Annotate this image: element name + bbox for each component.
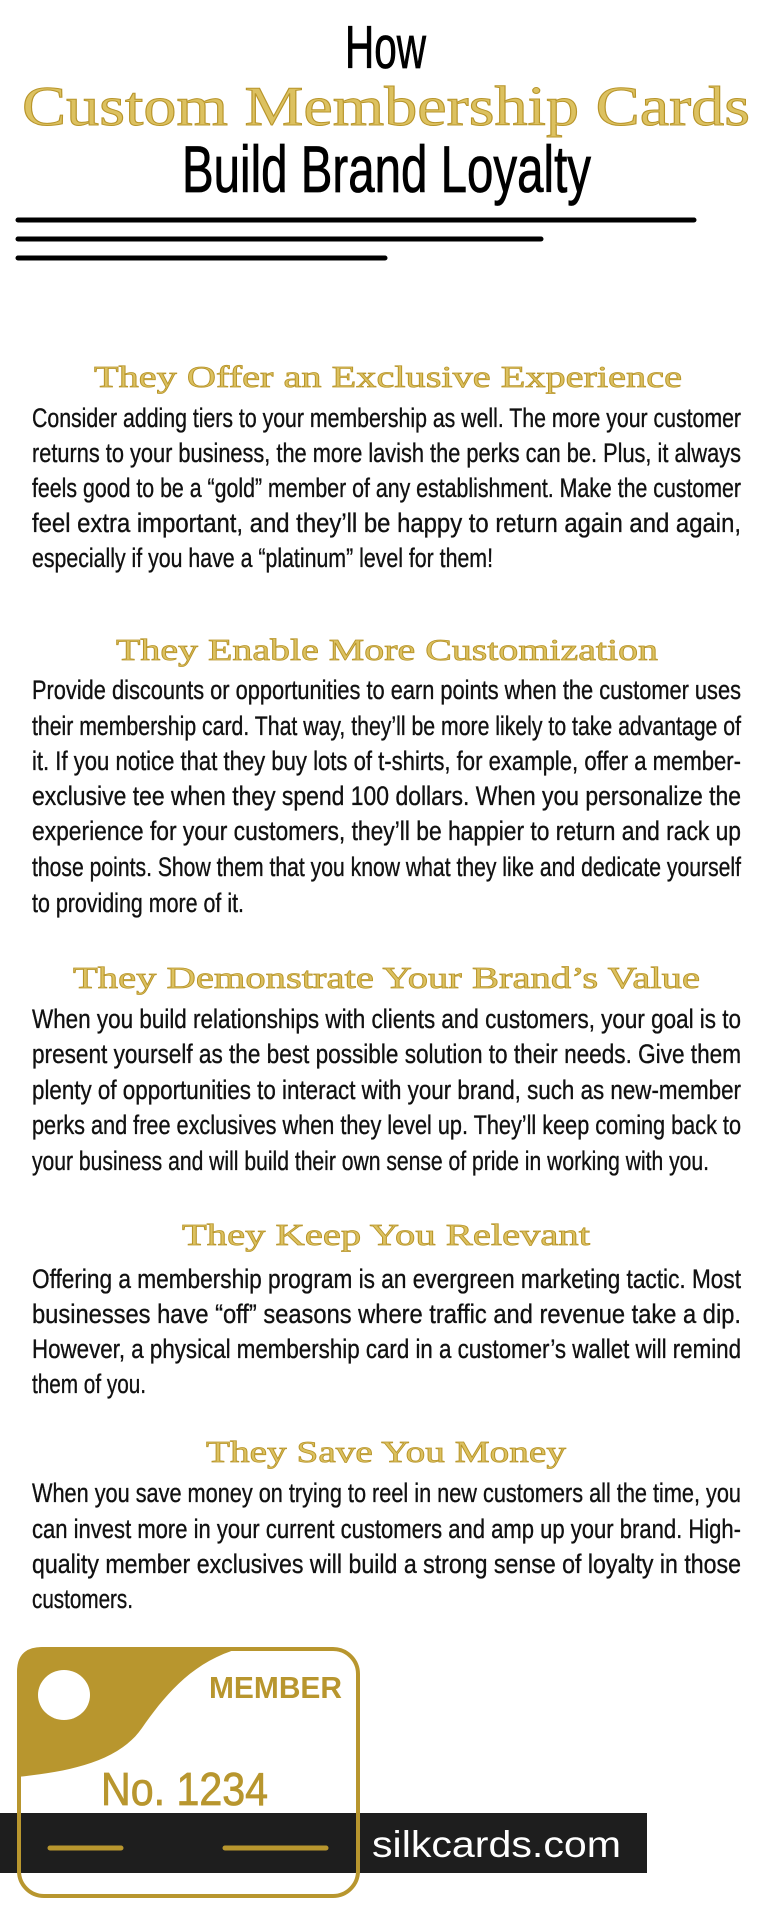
decorative title underline bars [18,220,694,258]
body text 3 [32,1004,741,1176]
section 4: relevant [32,1217,741,1399]
heading: They Enable More Customization: They Enable More Customization [116,632,659,667]
body text 5: customers. [32,1584,133,1614]
body text 1: especially if you have a “platinum” level for them! [32,543,493,573]
body text 2: to providing more of it. [32,888,244,918]
heading: They Demonstrate Your Brand's Value: They Demonstrate Your Brand’s Value [73,960,700,995]
section 2: customization [32,632,741,918]
heading: They Save You Money: They Save You Money [206,1434,567,1469]
card gold corner fill [17,1647,246,1777]
title: Build Brand Loyalty [182,132,591,206]
section 3: brand value [32,960,741,1176]
body text 4 [32,1264,741,1399]
body text 4: them of you. [32,1369,146,1399]
title [22,14,750,206]
card label MEMBER: MEMBER [209,1670,342,1705]
title: Custom Membership Cards [22,76,750,138]
body text 5 [32,1478,741,1614]
heading: They Offer an Exclusive Experience: They Offer an Exclusive Experience [94,359,682,394]
footer: membership card and website bar [0,1647,647,1896]
website text: silkcards.com [372,1824,621,1865]
card hole [38,1670,90,1720]
heading: They Keep You Relevant: They Keep You Relevant [182,1217,590,1252]
body text 1 [32,403,741,573]
section 1: exclusive experience [32,359,741,573]
black website bar [0,1813,647,1873]
title: How [345,14,426,81]
card stripe dashes [50,1846,326,1850]
section 5: save money [32,1434,741,1614]
card outline [19,1649,358,1896]
body text 2 [32,675,741,918]
card number: No. 1234 [101,1763,268,1815]
